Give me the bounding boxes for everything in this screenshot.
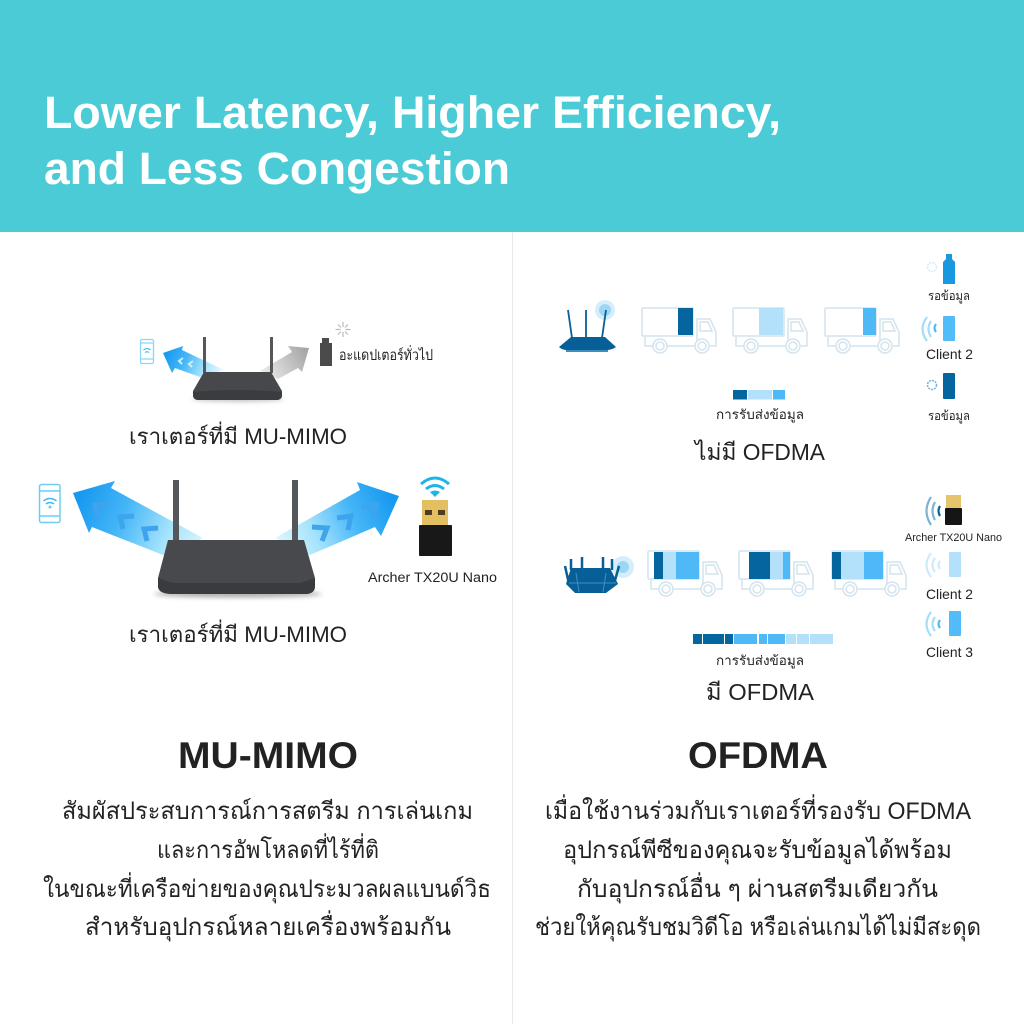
- caption: router 1: เราเตอร์ที่มี MU-MIMO: [129, 421, 347, 449]
- data bar: without OFDMA: [733, 390, 785, 400]
- arrow: small blue: [163, 346, 224, 377]
- icon: small phone: [140, 340, 154, 364]
- title: Lower Latency, Higher Efficiency,: [44, 87, 781, 138]
- arrow: blue left: [73, 481, 203, 555]
- caption: router 2: เราเตอร์ที่มี MU-MIMO: [129, 619, 347, 647]
- heading: MU-MIMO: MU-MIMO: [178, 735, 358, 776]
- client: waiting 1: [928, 254, 970, 304]
- title: [44, 87, 781, 194]
- heading: OFDMA: OFDMA: [688, 735, 828, 776]
- icon: wifi: [421, 478, 449, 497]
- client: waiting 2: รอข้อมูล: [928, 409, 970, 424]
- truck: 2: [739, 551, 813, 596]
- description: MU-MIMO: สัมผัสประสบการณ์การสตรีม การเล่นเกม: [62, 797, 473, 825]
- icon: small router: [192, 337, 284, 402]
- label: generic adapter: อะแดปเตอร์ทั่วไป: [339, 345, 433, 364]
- client: Client 3: [926, 611, 973, 660]
- description: OFDMA: เมื่อใช้งานร่วมกับเราเตอร์ที่รองรับ OFDMA: [545, 794, 971, 825]
- icon: nano adapter: [419, 500, 452, 556]
- description: MU-MIMO: [43, 797, 491, 942]
- client: Client 2: [922, 316, 973, 362]
- description: OFDMA: [535, 794, 981, 942]
- icon: phone: [40, 484, 60, 522]
- truck: 2: [733, 308, 807, 353]
- data bar: with OFDMA: [693, 634, 833, 644]
- client: Client 2: Client 2: [926, 346, 973, 362]
- description: OFDMA: อุปกรณ์พีซีของคุณจะรับข้อมูลได้พร้อม: [563, 836, 952, 865]
- client: waiting 1: รอข้อมูล: [928, 289, 970, 304]
- panel: MU-MIMO: [40, 322, 497, 942]
- caption: without OFDMA: ไม่มี OFDMA: [693, 439, 826, 465]
- label: data transfer: การรับส่งข้อมูล: [716, 407, 804, 423]
- truck: 1: [648, 551, 722, 596]
- title: and Less Congestion: [44, 143, 510, 194]
- icon: generic adapter: [320, 338, 332, 366]
- icon: router blue: [559, 300, 616, 352]
- client: Client 3: Client 3: [926, 644, 973, 660]
- description: MU-MIMO: ในขณะที่เครือข่ายของคุณประมวลผลแบนด์วิธ: [43, 872, 491, 904]
- icon: spinner: [336, 322, 350, 337]
- truck: 3: [825, 308, 899, 353]
- header banner: [0, 0, 1024, 232]
- client: Archer TX20U Nano: [905, 495, 1002, 544]
- client: Client 2: [926, 552, 973, 602]
- description: OFDMA: กับอุปกรณ์อื่น ๆ ผ่านสตรีมเดียวกัน: [577, 872, 938, 904]
- description: MU-MIMO: และการอัพโหลดที่ไร้ที่ติ: [157, 833, 379, 864]
- client: Client 2: Client 2: [926, 586, 973, 602]
- caption: with OFDMA: มี OFDMA: [706, 679, 815, 705]
- label: Archer TX20U Nano: Archer TX20U Nano: [368, 570, 497, 585]
- icon: router blue tri-band: [565, 556, 634, 593]
- panel: OFDMA: [535, 254, 1002, 942]
- diagram: router with generic adapter: [129, 322, 433, 449]
- diagram: router with Archer TX20U Nano: [40, 478, 497, 647]
- arrow: small grey: [260, 346, 309, 379]
- arrow: blue right: [275, 482, 399, 555]
- truck: 3: [832, 551, 906, 596]
- diagram: with OFDMA: [565, 495, 1002, 705]
- client: waiting 2: [928, 373, 970, 424]
- description: OFDMA: ช่วยให้คุณรับชมวิดีโอ หรือเล่นเกมได้ไม่มีสะดุด: [535, 913, 981, 942]
- diagram: without OFDMA: [559, 254, 973, 465]
- description: MU-MIMO: สำหรับอุปกรณ์หลายเครื่องพร้อมกัน: [85, 910, 451, 942]
- truck: 1: [642, 308, 716, 353]
- icon: large router: [154, 480, 322, 598]
- label: data transfer: การรับส่งข้อมูล: [716, 653, 804, 669]
- client: Archer TX20U Nano: Archer TX20U Nano: [905, 532, 1002, 544]
